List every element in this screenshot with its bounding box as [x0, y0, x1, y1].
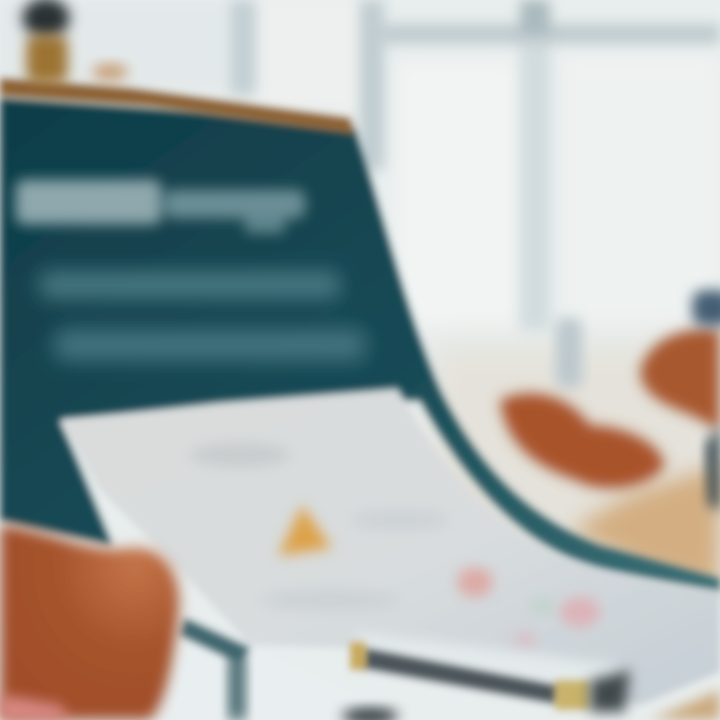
- teal document sheet: [0, 98, 720, 592]
- window frame mullions: [230, 0, 720, 330]
- wooden ledge with figure at top left: [0, 0, 355, 134]
- light paper chart sheet: [60, 388, 720, 705]
- right hand holding pen: [500, 290, 720, 510]
- heading placeholder bars: [16, 180, 305, 233]
- yellow-orange marker: [278, 505, 332, 556]
- pink and green markers: [513, 597, 600, 648]
- blurred object on desk: [556, 318, 582, 388]
- faint chart marks: [190, 443, 450, 612]
- body text placeholder bars: [40, 272, 365, 360]
- lower blurred area under paper: [170, 618, 720, 720]
- left hand holding document: [0, 525, 179, 720]
- wooden table top right: [570, 465, 720, 590]
- pen on paper: [350, 632, 630, 712]
- pink marker: [457, 567, 493, 597]
